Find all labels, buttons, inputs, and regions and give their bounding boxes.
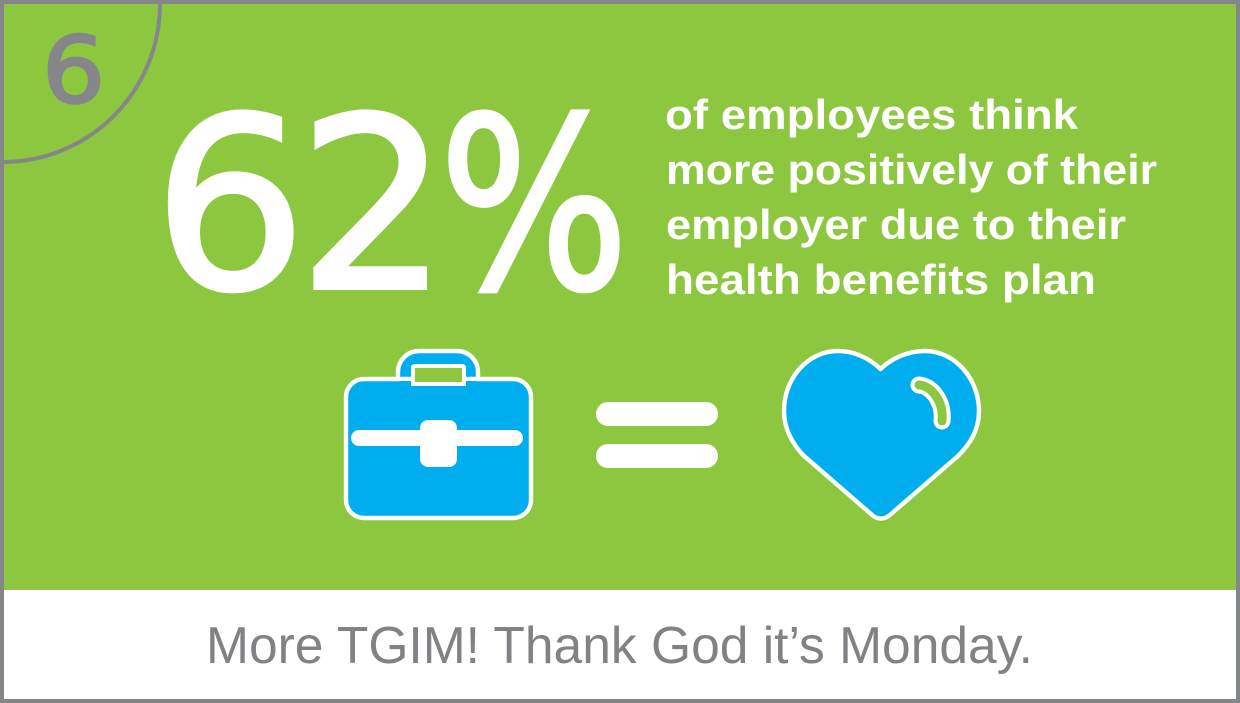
big statistic: 62% bbox=[153, 67, 629, 345]
big statistic: 62%: % bbox=[439, 67, 629, 344]
briefcase clasp bbox=[420, 420, 457, 467]
briefcase body bbox=[346, 379, 531, 518]
heart highlight bbox=[919, 385, 942, 421]
statistic description: employer due to their bbox=[666, 201, 1126, 248]
icon: heart bbox=[784, 351, 979, 518]
briefcase handle bbox=[398, 351, 478, 385]
badge number: 6 bbox=[42, 16, 105, 124]
big statistic: 62%: 6 bbox=[153, 67, 307, 345]
handle opening bbox=[413, 366, 464, 384]
quarter-circle number badge bbox=[3, 3, 160, 162]
statistic description bbox=[665, 91, 1157, 303]
statistic description: health benefits plan bbox=[666, 256, 1096, 303]
big statistic: 62%: 2 bbox=[298, 67, 449, 344]
statistic description: more positively of their bbox=[666, 146, 1157, 193]
icon: briefcase bbox=[346, 351, 531, 518]
equals sign bbox=[596, 402, 718, 468]
statistic description: of employees think bbox=[665, 91, 1079, 138]
footer tagline: More TGIM! Thank God it’s Monday. bbox=[206, 617, 1033, 675]
briefcase strap bbox=[351, 430, 523, 446]
panel: white footer band bbox=[0, 590, 1240, 703]
